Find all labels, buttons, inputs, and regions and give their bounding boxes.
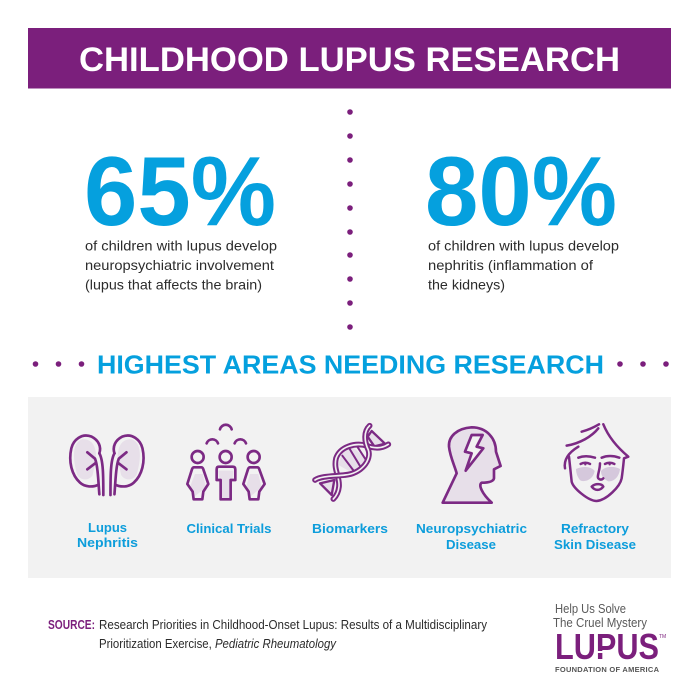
- icon: face with butterfly rash: [565, 424, 628, 501]
- statistic: 65% neuropsychiatric: of children with lupus develop: [85, 238, 277, 254]
- label: lupus nephritis: Nephritis: [77, 535, 138, 550]
- source citation: Research Priorities in Childhood-Onset Lupus: Results of a Multidisciplinary: [99, 618, 488, 632]
- statistic: 65% neuropsychiatric: neuropsychiatric involvement: [85, 257, 274, 273]
- logo: Lupus Foundation of America: [553, 602, 666, 674]
- statistic: 80% nephritis: 80%: [425, 136, 617, 246]
- logo: Lupus Foundation of America: LUPUS: [555, 626, 659, 667]
- logo: Lupus Foundation of America: Help Us Solve: [555, 602, 626, 616]
- label: neuropsychiatric disease: Neuropsychiatric: [416, 521, 527, 536]
- icon: DNA helix: [315, 426, 388, 499]
- source citation: [48, 618, 488, 651]
- section heading: HIGHEST AREAS NEEDING RESEARCH: [97, 350, 604, 380]
- label: neuropsychiatric disease: Disease: [446, 537, 496, 552]
- logo: Lupus Foundation of America: The Cruel Mystery: [553, 616, 648, 630]
- statistic: 80% nephritis: [425, 136, 619, 292]
- logo: Lupus Foundation of America: TM: [659, 634, 666, 640]
- label: clinical trials: Clinical Trials: [186, 521, 272, 536]
- label: lupus nephritis: Lupus: [88, 520, 127, 535]
- source citation: Prioritization Exercise, Pediatric Rheumatology: [99, 637, 337, 651]
- logo: Lupus Foundation of America: FOUNDATION OF AMERICA: [555, 665, 660, 674]
- vertical dotted divider: [347, 109, 353, 330]
- label: refractory skin disease: Refractory: [561, 521, 630, 536]
- label: refractory skin disease: [554, 521, 636, 552]
- statistic: 65% neuropsychiatric: 65%: [84, 136, 276, 246]
- label: neuropsychiatric disease: [416, 521, 527, 552]
- panel: research areas: [28, 397, 671, 578]
- source citation: SOURCE:: [48, 618, 95, 632]
- label: lupus nephritis: [77, 520, 138, 550]
- icon: kidneys: [70, 436, 144, 495]
- statistic: 80% nephritis: the kidneys): [428, 276, 505, 292]
- title banner: CHILDHOOD LUPUS RESEARCH: [79, 41, 620, 79]
- icon: clinical trial people: [187, 425, 265, 499]
- label: refractory skin disease: Skin Disease: [554, 537, 636, 552]
- statistic: 65% neuropsychiatric: [84, 136, 277, 292]
- statistic: 80% nephritis: nephritis (inflammation of: [428, 257, 593, 273]
- title banner: [28, 28, 671, 88]
- statistic: 80% nephritis: of children with lupus develop: [428, 238, 619, 254]
- statistic: 65% neuropsychiatric: (lupus that affects the brain): [85, 276, 262, 292]
- label: biomarkers: Biomarkers: [312, 521, 388, 536]
- icon: head with lightning bolt: [443, 427, 501, 503]
